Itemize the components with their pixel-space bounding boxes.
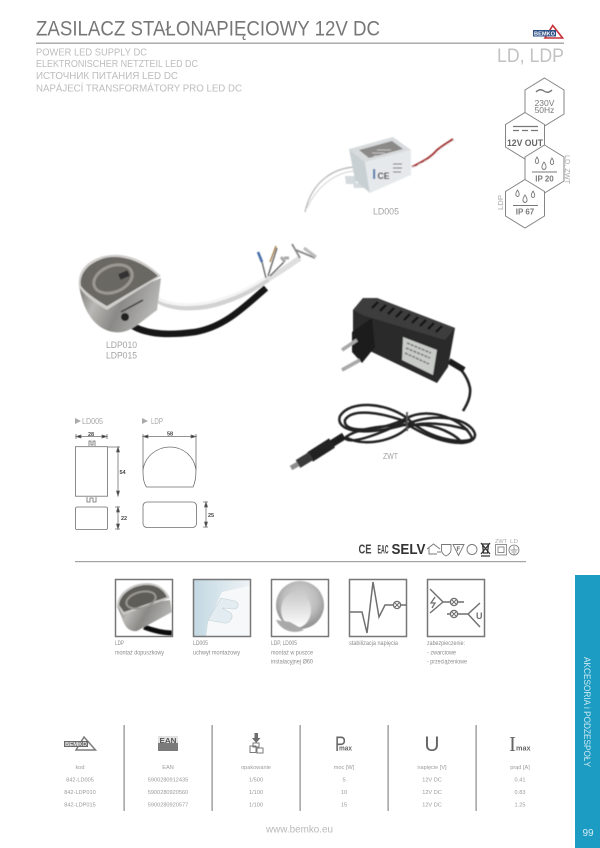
labels: LDP010 LDP015: LDP010 bbox=[106, 340, 137, 351]
icon: Imax bbox=[509, 732, 531, 756]
labels: LDP010 LDP015: LDP015 bbox=[106, 350, 137, 362]
table column: opakowanie bbox=[241, 733, 271, 808]
badge: IP 20: IP 20 bbox=[535, 174, 554, 184]
icon: EAN barcode: EAN bbox=[160, 736, 176, 745]
feature: voltage stabilisation: stabilizacja napięcia bbox=[349, 640, 398, 647]
icon: Bemko logo: BEMKO bbox=[65, 742, 87, 748]
feature: voltage stabilisation bbox=[349, 580, 407, 647]
dimension drawing: LDP bbox=[142, 417, 214, 528]
feature: protection: - przeciążeniowe bbox=[427, 658, 467, 666]
label: ZWT: ZWT bbox=[383, 451, 398, 461]
mark: SELV: SELV bbox=[392, 542, 426, 558]
subtitle translations: NAPÁJECÍ TRANSFORMÁTORY PRO LED DC bbox=[36, 82, 242, 94]
feature: surface mounting bbox=[115, 580, 172, 656]
photo: LD005 module bbox=[305, 137, 455, 212]
table column: napięcie: 12V DC bbox=[422, 802, 442, 808]
table column: napięcie: 12V DC bbox=[422, 790, 442, 796]
certification divider bbox=[75, 561, 526, 562]
subtitle translations bbox=[36, 46, 242, 94]
feature: protection: zabezpieczenie: bbox=[427, 640, 465, 647]
hexagon spec badges bbox=[506, 78, 564, 228]
table column: moc: 5 bbox=[342, 778, 346, 784]
photo: LD005 module: CE bbox=[378, 171, 390, 181]
table column: EAN: 5900280912435 bbox=[148, 778, 188, 784]
table column: moc: moc [W] bbox=[334, 765, 355, 771]
table column: EAN: EAN bbox=[162, 765, 174, 771]
table column: napięcie bbox=[417, 733, 447, 808]
subtitle translations: ИСТОЧНИК ПИТАНИЯ LED DC bbox=[36, 70, 178, 82]
icon: house bbox=[427, 544, 441, 554]
icon: crossed-out bin bbox=[481, 543, 490, 556]
table column dividers bbox=[124, 725, 477, 811]
icon: class II double square: ZWT bbox=[495, 539, 507, 545]
certification marks: EAC bbox=[378, 542, 389, 556]
table column: kod: 842-LD005 bbox=[66, 778, 94, 784]
feature: surface mounting: montaż dopuszkowy bbox=[115, 650, 165, 656]
photo: LDP module bbox=[79, 244, 316, 334]
icon: lamp circle bbox=[467, 544, 477, 554]
table column: opakowanie: opakowanie bbox=[241, 765, 271, 771]
badge: IP 67 bbox=[506, 180, 544, 228]
icon: earth symbol bbox=[509, 539, 519, 555]
labels: LDP010 LDP015 bbox=[106, 340, 137, 362]
table column: EAN bbox=[148, 736, 188, 808]
header divider bbox=[36, 42, 564, 44]
mark: CE: CE bbox=[358, 542, 372, 556]
badge: 12V OUT bbox=[506, 112, 544, 159]
icon: Pmax: max bbox=[339, 744, 353, 752]
feature: protection: U bbox=[476, 611, 482, 621]
title: ZASILACZ STAŁONAPIĘCIOWY 12V DC bbox=[36, 18, 380, 40]
feature: junction box mounting bbox=[271, 580, 328, 666]
heading: LDP: LDP bbox=[151, 417, 163, 426]
side tab: 99 bbox=[582, 828, 594, 839]
product code heading: LD, LDP bbox=[497, 45, 564, 67]
table column: moc: 15 bbox=[341, 802, 347, 808]
side tab bbox=[575, 575, 600, 848]
table column: EAN: 5900280920560 bbox=[148, 790, 188, 796]
feature: junction box mounting: instalacyjnej Ø60 bbox=[271, 658, 313, 666]
badge: 12V OUT: 12V OUT bbox=[507, 138, 543, 148]
subtitle translations: POWER LED SUPPLY DC bbox=[36, 46, 147, 58]
photo: ZWT plug-in adapter bbox=[291, 298, 475, 468]
table column: opakowanie: 1/100 bbox=[249, 802, 263, 808]
table column: opakowanie: 1/500 bbox=[249, 778, 263, 784]
table column: EAN: 5900280920577 bbox=[148, 802, 188, 808]
icon: Imax: max bbox=[516, 744, 531, 752]
badge: 230V 50Hz: 230V bbox=[535, 98, 555, 108]
feature: surface mounting: LDP bbox=[115, 640, 124, 647]
icon: Imax: I bbox=[509, 732, 516, 756]
subtitle translations: ELEKTRONISCHER NETZTEIL LED DC bbox=[36, 58, 198, 70]
icon: shield bbox=[442, 544, 451, 556]
side label: LD, ZWT: LD, ZWT bbox=[563, 155, 570, 185]
logo: Bemko header bbox=[533, 26, 563, 38]
icon: earth symbol: LD bbox=[510, 539, 518, 545]
badge: 230V 50Hz: 50Hz bbox=[535, 105, 554, 115]
table column: kod bbox=[64, 737, 96, 808]
feature: mounting bracket bbox=[193, 580, 250, 656]
table column: kod: 842-LDP015 bbox=[64, 802, 96, 808]
dimension drawing: LD005: 54 bbox=[120, 470, 127, 476]
feature: protection bbox=[427, 580, 484, 666]
logo: Bemko header: BEMKO bbox=[534, 31, 556, 37]
badge: 230V 50Hz bbox=[525, 78, 564, 126]
table column: prąd bbox=[509, 732, 531, 808]
heading: LD005: LD005 bbox=[82, 417, 103, 426]
table column: napięcie: napięcie [V] bbox=[417, 765, 447, 771]
certification marks bbox=[358, 539, 519, 558]
side tab: AKCESORIA i PODZESPOŁY bbox=[582, 657, 592, 767]
feature: mounting bracket: LD005 bbox=[193, 640, 208, 647]
table column: moc: 10 bbox=[341, 790, 347, 796]
badge: IP 20 bbox=[525, 145, 564, 193]
feature: junction box mounting: LDP, LD005 bbox=[271, 640, 297, 647]
table column: opakowanie: 1/100 bbox=[249, 790, 263, 796]
table column: prąd: prąd [A] bbox=[510, 765, 530, 771]
table column: prąd: 0.41 bbox=[515, 778, 525, 784]
dimension drawing: LDP: 25 bbox=[208, 513, 214, 519]
table column: prąd: 1.25 bbox=[515, 802, 525, 808]
footer website: www.bemko.eu bbox=[265, 824, 333, 836]
icon: U: U bbox=[424, 733, 440, 756]
feature: mounting bracket: uchwyt montażowy bbox=[193, 650, 241, 656]
table column: prąd: 0.83 bbox=[515, 790, 525, 796]
icon: F triangle bbox=[453, 544, 464, 556]
badge: IP 67: IP 67 bbox=[516, 208, 535, 216]
icon: class II double square bbox=[495, 539, 507, 555]
icon: F triangle: F bbox=[456, 547, 460, 553]
label: LD005: LD005 bbox=[373, 206, 399, 218]
dimension drawing: LD005 bbox=[75, 417, 127, 530]
table column: napięcie: 12V DC bbox=[422, 778, 442, 784]
side label: LDP: LDP bbox=[498, 195, 505, 210]
dimension drawing: LDP: 58 bbox=[167, 432, 173, 438]
table column: kod: kod bbox=[75, 765, 85, 771]
icon: packaging bbox=[250, 733, 263, 753]
table column: kod: 842-LDP010 bbox=[64, 790, 96, 796]
icon: Pmax: P bbox=[335, 733, 346, 756]
dimension drawing: LD005: 28 bbox=[88, 432, 94, 438]
feature: protection: - zwarciowe bbox=[427, 650, 456, 656]
dimension drawing: LD005: 22 bbox=[121, 516, 127, 522]
table column: moc bbox=[334, 733, 355, 808]
feature: junction box mounting: montaż w puszce bbox=[271, 650, 313, 656]
